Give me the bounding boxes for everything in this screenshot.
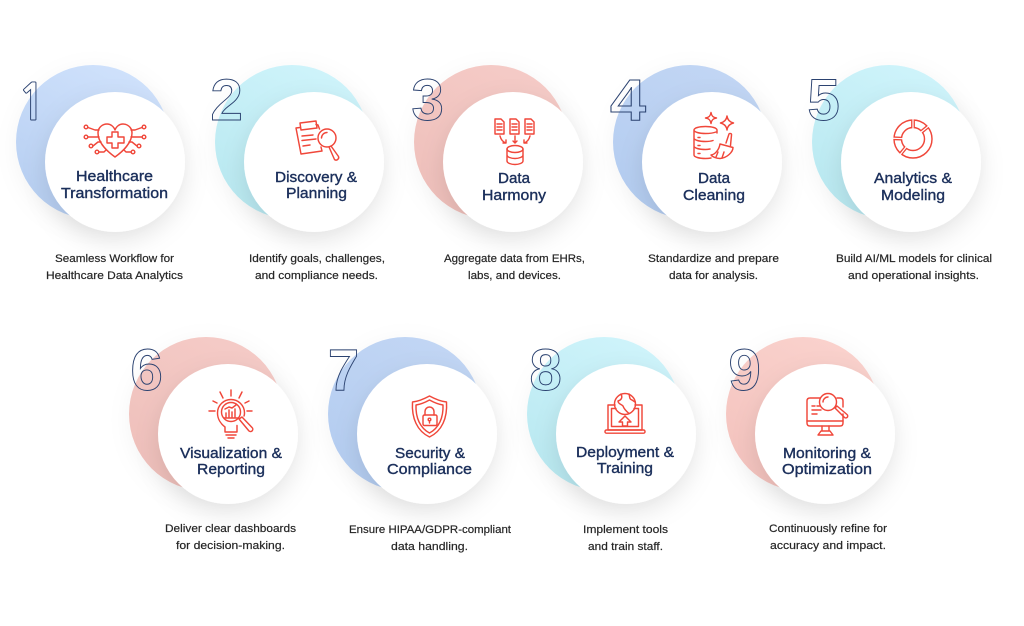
number 3: 3 [412, 68, 444, 133]
icon: documents into database [495, 119, 534, 164]
number 2: 2 [210, 68, 243, 133]
description [648, 253, 779, 282]
icon: light bulb with chart and magnifier [209, 390, 253, 438]
description [249, 253, 385, 282]
description: Seamless Workflow for [55, 253, 174, 265]
panel: step 1 Healthcare Transformation [16, 65, 185, 282]
panel: step 4 Data Cleaning [610, 65, 782, 282]
panel: step 6 Visualization & Reporting [129, 337, 298, 552]
heading: Monitoring & [783, 445, 871, 462]
heading: Compliance [387, 461, 472, 478]
description [444, 253, 585, 282]
heading: Cleaning [683, 187, 745, 204]
panel: step 7 Security & Compliance [328, 337, 512, 553]
description: Standardize and prepare [648, 253, 779, 265]
heading: Transformation [61, 185, 168, 202]
heading: Discovery & [275, 169, 357, 186]
icon: shield with padlock [412, 396, 447, 437]
description: and train staff. [588, 541, 663, 553]
description: accuracy and impact. [770, 540, 886, 552]
panel: step 8 Deployment & Training [527, 337, 696, 553]
heading: Data [498, 170, 531, 187]
description [165, 523, 296, 552]
heading [482, 170, 547, 204]
heading [782, 445, 872, 478]
description: Deliver clear dashboards [165, 523, 296, 535]
description [836, 253, 992, 282]
heading [275, 169, 357, 202]
description: data handling. [391, 541, 468, 553]
icon: laptop with globe and upload arrow [605, 394, 645, 433]
heading: Training [597, 460, 653, 477]
description: Build AI/ML models for clinical [836, 253, 992, 265]
heading [874, 170, 952, 204]
heading: Security & [395, 445, 465, 462]
heading: Healthcare [76, 168, 153, 185]
description: for decision-making. [176, 540, 285, 552]
description: data for analysis. [669, 270, 758, 282]
number 8: 8 [530, 338, 562, 403]
heading: Harmony [482, 187, 547, 204]
description [46, 253, 183, 282]
icon: monitor with magnifier [807, 394, 848, 435]
panel: step 5 Analytics & Modeling [808, 65, 992, 282]
heading [180, 445, 282, 478]
heading [387, 445, 472, 478]
number 7: 7 [328, 338, 359, 403]
heading: Reporting [197, 461, 265, 478]
description [349, 524, 512, 553]
heading: Visualization & [180, 445, 282, 462]
icon: clipboard with magnifier [296, 121, 339, 160]
number 6: 6 [130, 338, 163, 403]
description: and compliance needs. [255, 270, 378, 282]
icon: database with broom and sparkles [694, 112, 734, 158]
description: Ensure HIPAA/GDPR-compliant [349, 524, 512, 536]
number 1: 1 [17, 79, 47, 128]
description: Continuously refine for [769, 523, 887, 535]
icon: segmented donut chart [891, 117, 932, 158]
description: Healthcare Data Analytics [46, 270, 183, 282]
heading: Planning [286, 185, 347, 202]
heading [61, 168, 168, 202]
icon: heart with medical cross and circuits [84, 124, 146, 157]
heading: Deployment & [576, 444, 674, 461]
heading: Modeling [881, 187, 945, 204]
description: Implement tools [583, 524, 668, 536]
heading: Analytics & [874, 170, 952, 187]
number 5: 5 [808, 68, 840, 133]
description [769, 523, 887, 552]
heading: Data [698, 170, 731, 187]
panel: step 2 Discovery & Planning [210, 65, 385, 282]
description [583, 524, 668, 553]
number 4: 4 [610, 68, 646, 133]
description: Identify goals, challenges, [249, 253, 385, 265]
heading [683, 170, 745, 204]
heading [576, 444, 674, 477]
heading: Optimization [782, 461, 872, 478]
number 9: 9 [728, 338, 761, 403]
panel: step 3 Data Harmony [412, 65, 585, 282]
description: Aggregate data from EHRs, [444, 253, 585, 265]
panel: step 9 Monitoring & Optimization [726, 337, 895, 552]
description: labs, and devices. [468, 270, 561, 282]
description: and operational insights. [848, 270, 979, 282]
